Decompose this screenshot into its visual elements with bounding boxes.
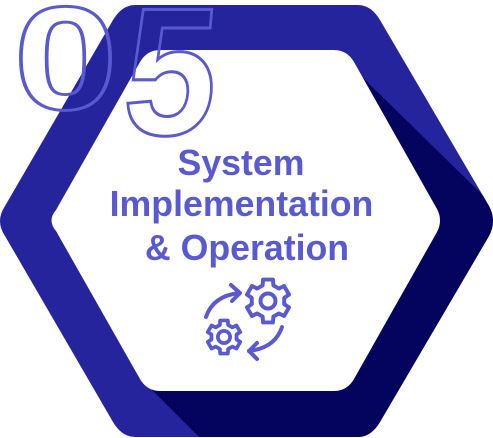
large gear	[247, 280, 289, 322]
title: System	[178, 143, 304, 183]
icon: gears with cycle arrows	[206, 280, 289, 359]
title	[110, 143, 373, 268]
arrow: top cycle	[206, 285, 240, 317]
dark shadow band	[150, 65, 493, 438]
inner white hexagon	[52, 50, 440, 391]
step number 05	[14, 0, 227, 173]
arrow: bottom cycle	[249, 327, 282, 359]
title: Implementation	[110, 184, 373, 224]
title: & Operation	[145, 228, 349, 268]
small gear	[208, 320, 240, 354]
